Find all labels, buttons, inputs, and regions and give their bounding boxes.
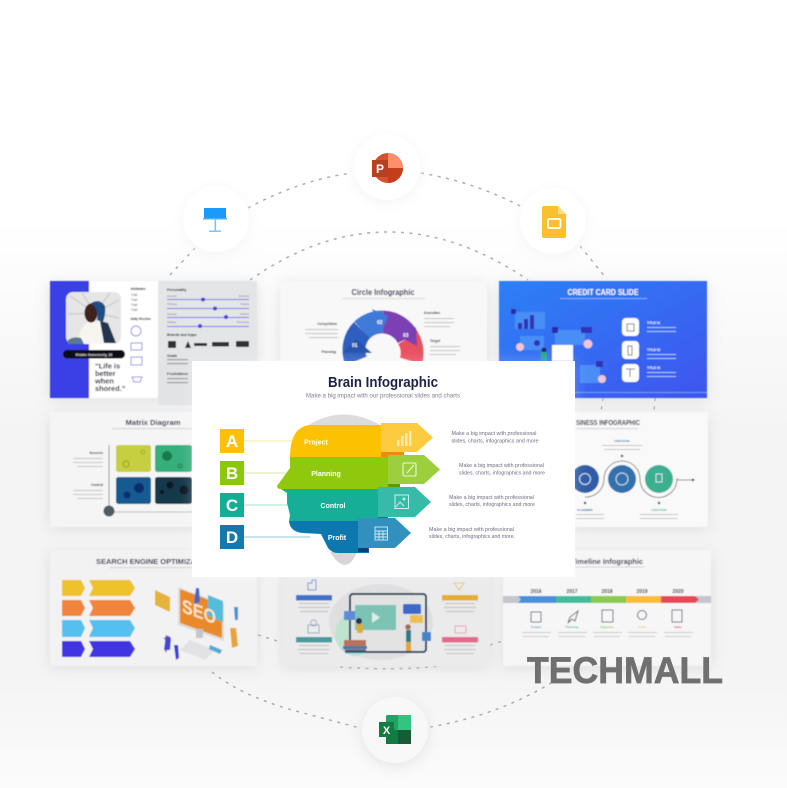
timeline bar	[503, 596, 711, 603]
icon: bar chart	[397, 431, 412, 446]
right labels	[442, 583, 478, 654]
description text: Make a big impact with professional	[429, 527, 514, 533]
quote: “Life is	[95, 362, 120, 370]
card icons and titles: TITLE 03	[647, 366, 661, 370]
matrix grid	[116, 445, 192, 504]
icon: Google Slides	[520, 188, 586, 257]
circle labels: Execution	[424, 311, 440, 315]
head labels: Profit	[328, 535, 347, 542]
panel: circle infographic: 01	[352, 343, 358, 349]
letter badges	[220, 429, 244, 549]
process circles	[571, 455, 694, 504]
panel: persona slide	[50, 281, 257, 405]
personality sliders: Feeling	[240, 302, 250, 306]
card icons and titles: TITLE 02	[647, 348, 661, 352]
routine icons	[131, 326, 142, 382]
panel: circle infographic	[280, 281, 487, 371]
main subtitle: Make a big impact with our professional slides and charts	[306, 392, 460, 400]
attributes list: Attributes	[130, 287, 146, 291]
personality sliders: Personality	[167, 288, 186, 292]
attributes list: Trait	[131, 298, 137, 302]
card icons and titles: TITLE 01	[647, 321, 661, 325]
attributes list: Daily Routine	[130, 317, 151, 321]
seo illustration	[155, 587, 238, 660]
icon: Keynote	[183, 186, 249, 255]
description text: slides, charts, infographics and more	[452, 438, 539, 444]
head labels: Project	[304, 440, 329, 446]
personality sliders: Sensing	[167, 312, 177, 316]
name pill: Middle Generosity, 39	[76, 353, 112, 357]
attributes list: Trait	[131, 303, 137, 307]
panel: business infographic: CREATION	[614, 439, 630, 443]
circle chart	[354, 322, 412, 361]
personality sliders: Frustrations	[167, 372, 188, 376]
description text: Make a big impact with professional	[449, 495, 534, 501]
letter badges: D	[226, 528, 238, 547]
watermark: TECHMALL: TECHMALL	[527, 650, 723, 691]
panel: business infographic: SINESS INFOGRAPHIC	[576, 418, 641, 427]
icon: PowerPoint	[354, 134, 420, 203]
panel shadows	[50, 284, 711, 668]
head illustration	[277, 414, 440, 565]
description text: slides, charts, infographics and more	[449, 502, 535, 508]
panel: circle infographic: 02	[377, 320, 383, 326]
video illustration	[329, 584, 433, 660]
panel: credit card slide: CREDIT CARD SLIDE	[568, 288, 639, 297]
timeline years: 2019	[636, 589, 648, 595]
timeline labels: Project	[531, 625, 541, 629]
panel: video learning slide	[282, 560, 490, 666]
personality sliders: Goals	[167, 354, 177, 358]
panel: brain infographic main slide	[192, 361, 575, 577]
panel: search engine optimization	[50, 550, 257, 666]
icon: PowerPoint: P	[376, 162, 384, 176]
main title: Brain Infographic	[328, 374, 438, 391]
personality sliders: Extrovert	[239, 294, 249, 298]
personality sliders: Perceiving	[237, 320, 250, 324]
circle labels: Planning	[322, 350, 336, 354]
head labels	[304, 440, 347, 542]
timeline labels: Profit	[638, 625, 646, 629]
quote	[94, 362, 126, 393]
panel: circle infographic: Circle Infographic	[352, 288, 415, 297]
description text: slides, charts, infographics and more.	[429, 534, 515, 540]
circle labels: Competition	[317, 322, 337, 326]
panel: business infographic: PLANNING	[577, 508, 593, 512]
panel: matrix diagram: Control	[91, 483, 103, 487]
connector lines	[244, 441, 310, 537]
personality sliders: Brands and Apps	[167, 333, 197, 337]
panel: matrix diagram: Matrix Diagram	[126, 418, 181, 427]
head labels: Planning	[311, 471, 341, 478]
icon: calculator grid	[375, 527, 388, 540]
personality sliders	[167, 288, 250, 383]
timeline labels: Objective	[600, 625, 614, 629]
icon: Excel: X	[383, 725, 391, 737]
panel: business infographic	[560, 412, 708, 527]
quote: when	[94, 376, 114, 386]
icon: Excel	[362, 697, 428, 766]
timeline years: 2016	[530, 589, 542, 595]
personality sliders: Intuition	[240, 312, 250, 316]
head labels: Control	[321, 503, 345, 510]
circle labels	[317, 311, 441, 354]
letter badges: B	[226, 464, 238, 483]
panel: timeline infographic	[503, 550, 711, 666]
seo arrows	[62, 580, 135, 657]
card icons and titles	[622, 318, 676, 382]
seo illustration: SEO	[182, 596, 216, 629]
panel: circle infographic: 03	[403, 333, 409, 339]
panel: matrix diagram	[50, 412, 210, 527]
photo of woman	[66, 292, 121, 344]
description text: slides, charts, infographics and more	[459, 470, 545, 476]
panel: credit card slide	[499, 281, 707, 398]
description text: Make a big impact with professional	[452, 431, 536, 437]
letter badges: A	[226, 432, 238, 451]
description text: Make a big impact with professional	[459, 463, 544, 469]
timeline years	[530, 589, 684, 595]
timeline labels: Planning	[566, 625, 578, 629]
attributes list: Trait	[131, 293, 137, 297]
panel: business infographic: CREATION	[651, 508, 667, 512]
name pill	[63, 350, 125, 358]
timeline labels: Sales	[674, 625, 682, 629]
attributes list	[130, 287, 151, 321]
timeline years: 2017	[566, 589, 578, 595]
left labels	[296, 580, 332, 654]
timeline labels	[531, 625, 682, 629]
circle labels: Target	[430, 339, 441, 343]
panel: search engine optimization: SEARCH ENGINE OPTIMIZA	[96, 557, 197, 566]
personality sliders: Judging	[167, 320, 177, 324]
icon: pencil note	[403, 463, 416, 476]
quote: better	[95, 369, 116, 378]
personality sliders: Thinking	[167, 302, 177, 306]
timeline icons	[531, 610, 682, 623]
card illustration	[511, 309, 606, 383]
timeline years: 2018	[601, 589, 613, 595]
attributes list: Trait	[131, 308, 137, 312]
panel: timeline infographic: Timeline Infographic	[571, 557, 643, 566]
quote: shored.”	[95, 384, 126, 393]
timeline years: 2020	[672, 589, 684, 595]
description text	[429, 431, 545, 540]
icon: picture	[395, 495, 408, 508]
dashed connection arcs	[170, 173, 655, 728]
letter badges: C	[226, 496, 238, 515]
panel: matrix diagram: Success	[89, 451, 103, 455]
personality sliders: Introvert	[167, 294, 177, 298]
